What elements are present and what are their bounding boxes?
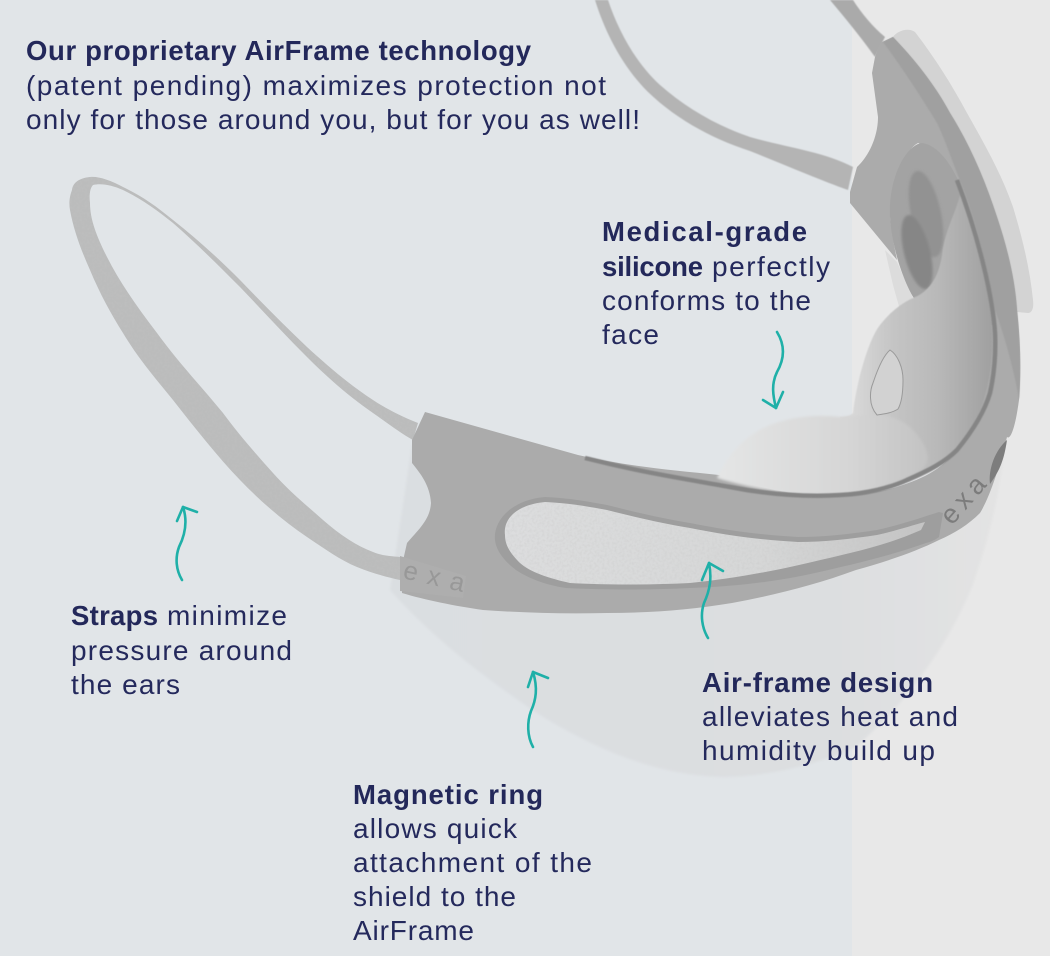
frame: side vent [990,440,1007,484]
face shield [390,440,1005,777]
callout: medical-grade silicone: Medical-grade [602,216,807,247]
callout: medical-grade silicone: perfectly [712,251,830,282]
silicone: upper pale lobe [870,350,903,415]
callout: medical-grade silicone: silicone [602,251,703,282]
frame: exa mark right: exa [934,469,993,530]
callout: air-frame design: humidity build up [702,735,935,766]
frame: exa mark left: exa [401,555,468,598]
callout: straps: pressure around [71,635,292,666]
callout: air-frame design [702,667,958,766]
silicone: pale nose pad [717,415,928,494]
callout: straps: the ears [71,669,180,700]
frame: mesh pad [505,502,925,584]
heading: Our proprietary AirFrame technology [26,35,532,66]
callout: straps [71,600,292,700]
callout: magnetic ring [353,779,592,946]
silicone: cheek shell [840,195,992,495]
callout: medical-grade silicone: face [602,319,659,350]
callout: magnetic ring: shield to the [353,881,516,912]
shield top edge [893,30,1033,313]
callout: straps: minimize [167,600,287,631]
arrow: to straps [177,507,197,580]
heading: only for those around you, but for you as well! [26,104,640,135]
arrow: to silicone [763,332,783,408]
callout: magnetic ring: attachment of the [353,847,592,878]
callout: magnetic ring: AirFrame [353,915,474,946]
callout: straps: Straps [71,600,158,631]
frame: inner dark cavity [890,143,993,330]
heading: (patent pending) maximizes protection not [26,70,606,101]
frame: inner rim line [585,180,995,496]
ear strap: right top [830,0,885,57]
callout: air-frame design: alleviates heat and [702,701,958,732]
ear strap: left loop [69,177,418,580]
callout: air-frame design: Air-frame design [702,667,933,698]
arrow: to magnetic ring [528,672,548,747]
ear strap: right lower [595,0,853,190]
silicone seal [717,195,992,495]
callout: magnetic ring: Magnetic ring [353,779,543,810]
frame: air window recess [495,497,943,590]
heading [26,35,640,135]
callout: medical-grade silicone [602,216,830,350]
pale shield behind cavity [885,250,913,310]
frame: outer darker band [883,37,1020,400]
arrow: to air-frame [702,563,723,638]
frame: cavity dark lobes [895,168,950,292]
main frame [402,37,1020,613]
callout: medical-grade silicone: conforms to the [602,285,811,316]
callout: magnetic ring: allows quick [353,813,518,844]
